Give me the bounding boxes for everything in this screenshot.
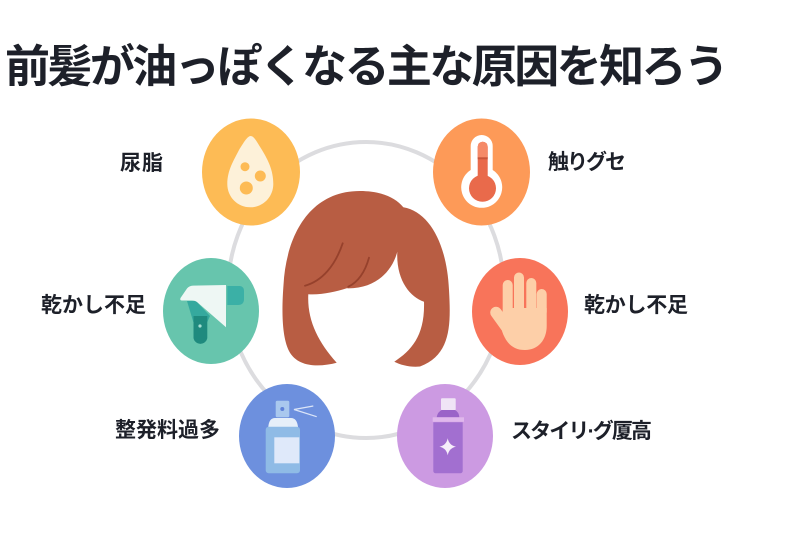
icon: hair dryer [163, 258, 259, 364]
label: sebum: 尿脂 [120, 152, 163, 175]
ring connecting causes [228, 142, 504, 438]
label: touching habit: 触りグセ [548, 150, 626, 174]
icon: hand [472, 258, 568, 365]
label: too much styling product: 整発料過多 [115, 419, 220, 442]
icon: spray can [239, 384, 335, 488]
icon: styling bottle [397, 384, 493, 488]
icon: thermometer [433, 118, 530, 226]
hair illustration [282, 191, 450, 367]
label: insufficient drying, right: 乾かし不足 [584, 294, 688, 317]
title: 前髪が油っぽくなる主な原因を知ろう [5, 41, 729, 92]
icon: oil drop [202, 118, 300, 226]
label: styling: スタイリ·グ厦高 [511, 419, 652, 443]
label: insufficient drying, left: 乾かし不足 [41, 294, 146, 317]
